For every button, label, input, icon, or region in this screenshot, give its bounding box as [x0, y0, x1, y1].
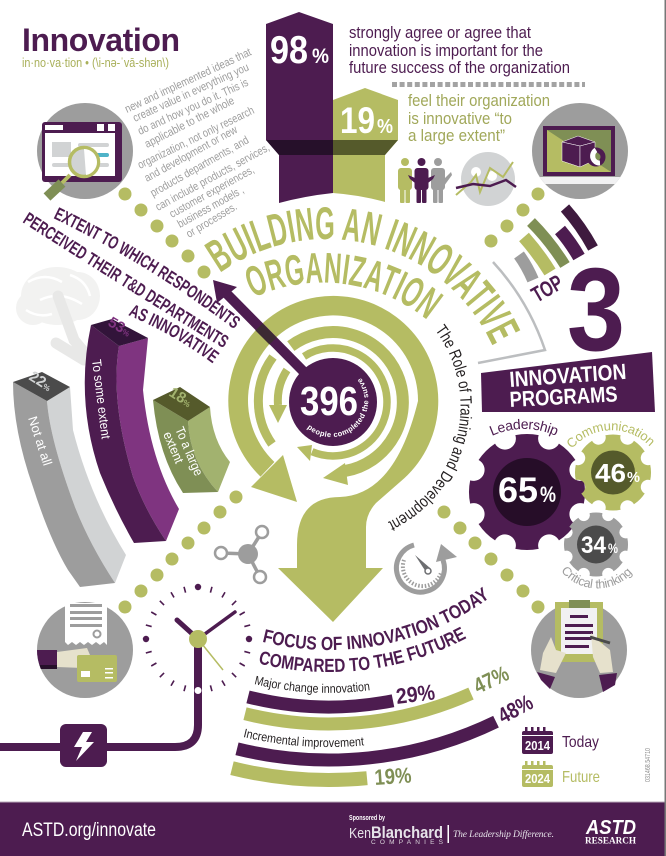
pillar: 19 percent: %	[377, 116, 393, 138]
definition text	[123, 46, 272, 241]
heading: top 3: TOP	[527, 270, 567, 307]
icon: lightning plug	[60, 724, 107, 767]
center circle: 396 people: people completed the survey	[306, 378, 368, 438]
pillar: 98 percent: %	[312, 45, 329, 68]
top 3 arc bars	[519, 208, 593, 280]
clock ticks	[146, 587, 250, 691]
footer	[0, 802, 664, 856]
banner: innovation programs: PROGRAMS	[509, 381, 618, 412]
icon: browser window and magnifier	[37, 103, 133, 199]
chart: incremental improvement	[230, 689, 537, 790]
icon: faint brain and pointing hand	[16, 267, 100, 360]
legend: today	[522, 727, 599, 754]
bar: 22 percent not at all	[13, 368, 126, 587]
banner: innovation programs	[481, 352, 655, 412]
footer: The Leadership Difference.	[453, 829, 554, 840]
center circle: 396 people	[289, 358, 377, 446]
chart: major change innovation: Major change innovation	[254, 676, 370, 695]
bar: 53 percent to some extent: To some extent	[89, 359, 114, 440]
definition text: create value in everything you	[131, 62, 251, 125]
heading: building an innovative organization: ORGANIZATION	[246, 253, 444, 319]
text: feel their organization: is innovative “to	[408, 110, 512, 128]
pillar: 98 percent: 98	[270, 29, 308, 72]
gear: leadership 65 percent: %	[540, 482, 556, 507]
center circle: 396 people: 396	[300, 378, 358, 424]
lightbulb arrow graphic	[228, 296, 438, 622]
gear: critical thinking 34 percent: %	[608, 540, 618, 556]
bar: 22 percent not at all: 22%	[26, 368, 55, 395]
bar: 18 percent to a large extent	[153, 384, 230, 493]
footer: Ken	[349, 825, 371, 842]
icon: people	[398, 158, 452, 203]
icon: laptop with box	[532, 103, 628, 199]
chart: major change innovation: 29%	[395, 679, 436, 709]
title: Innovation	[22, 22, 180, 58]
definition text: products departments, and	[149, 135, 251, 200]
gear: critical thinking 34 percent: 34	[581, 532, 607, 559]
icon: clipboard and hands	[531, 600, 627, 698]
arrow: toward extent chart	[213, 280, 305, 373]
chart: incremental improvement: 48%	[494, 689, 537, 728]
heading: extent respondents: AS INNOVATIVE	[128, 305, 220, 364]
text: feel their organization: a large extent”	[408, 127, 505, 145]
heading: top 3: 3	[567, 244, 625, 376]
gear: leadership 65 percent: 65	[498, 471, 538, 510]
definition text: organization, not only research	[136, 105, 256, 172]
footer: COMPANIES	[371, 839, 444, 846]
pillar: 19 percent: 19	[340, 100, 375, 141]
definition text: customer experiences,	[168, 164, 257, 221]
icon: line chart	[456, 152, 516, 206]
definition text: and development or new	[143, 124, 240, 185]
legend: future	[522, 761, 600, 787]
text: strongly agree: strongly agree or agree that	[349, 24, 531, 42]
decorative dots bottom left	[118, 490, 242, 614]
pillar: 98 percent	[266, 12, 333, 203]
legend: today: Today	[562, 734, 599, 751]
gear: critical thinking 34 percent	[562, 512, 633, 588]
footer: ASTD	[585, 817, 636, 839]
decorative dots bottom right	[438, 506, 544, 614]
text: feel their organization	[408, 92, 550, 145]
gear: communication 46 percent: Communication	[567, 421, 654, 447]
heading: building an innovative organization: BUILDING AN INNOVATIVE	[204, 207, 520, 346]
text: strongly agree: innovation is important for the	[349, 42, 543, 60]
job code: 031468.54710	[645, 748, 652, 782]
gear: communication 46 percent: %	[627, 469, 640, 486]
gear: communication 46 percent	[567, 421, 654, 510]
legend: future: Future	[562, 769, 600, 786]
bar: 18 percent to a large extent: To a large	[172, 424, 206, 478]
definition text: do and how you do it. This is	[136, 77, 251, 138]
definition text: applicable to the whole	[143, 95, 237, 151]
banner: innovation programs: INNOVATION	[509, 359, 627, 392]
heading: extent respondents: EXTENT TO WHICH RESPONDENTS	[54, 207, 240, 328]
bar: 18 percent to a large extent: 18%	[166, 384, 195, 411]
definition text: new and implemented ideas that	[123, 46, 254, 116]
chart: major change innovation	[244, 661, 513, 730]
bar: 53 percent to some extent	[85, 314, 179, 543]
text: strongly agree: future success of the organization	[349, 59, 570, 77]
footer: Blanchard	[371, 823, 443, 842]
decorative dots top left	[118, 188, 210, 278]
heading: extent respondents: PERCEIVED THEIR T&D DEPARTMENTS	[22, 212, 228, 347]
definition text: can include products, services,	[154, 142, 272, 214]
gear: critical thinking 34 percent: Critical thinking	[562, 567, 633, 588]
bar: 22 percent not at all: Not at all	[25, 414, 55, 468]
bar: 18 percent to a large extent: extent	[160, 429, 187, 466]
legend: today: 2014	[525, 738, 551, 753]
definition text: business models ,	[176, 184, 246, 231]
heading: focus of innovation: COMPARED TO THE FUTURE	[260, 626, 466, 672]
text: strongly agree	[349, 24, 570, 77]
heading: focus of innovation: FOCUS OF INNOVATION TODAY	[263, 586, 487, 650]
legend: future: 2024	[525, 771, 551, 786]
chart: major change innovation: 47%	[470, 661, 513, 699]
gear: communication 46 percent: 46	[595, 458, 626, 488]
footer: RESEARCH	[585, 836, 636, 846]
definition text: or processes.	[184, 201, 239, 241]
pillar: 19 percent	[333, 88, 398, 202]
decorative dots top right	[484, 188, 544, 248]
icon: receipt and card in hand	[37, 602, 133, 698]
gear: leadership 65 percent: Leadership	[489, 418, 558, 436]
footer: Sponsored by	[349, 815, 385, 822]
text: feel their organization: feel their organization	[408, 92, 550, 110]
icon: stopwatch with arrow	[396, 544, 457, 592]
icon: molecule	[215, 526, 268, 583]
subheading: the role of training and development: The Role of Training and Development	[388, 324, 472, 531]
bar: 53 percent to some extent: 53%	[105, 314, 134, 340]
title: in·no·va·tion • (\i-nə-ˈvā-shən\)	[22, 56, 169, 70]
footer: ASTD.org/innovate	[22, 820, 156, 841]
heading: top 3	[527, 244, 625, 376]
chart: incremental improvement: Incremental improvement	[244, 728, 364, 750]
gear: leadership 65 percent	[468, 418, 585, 550]
clock with power cord	[0, 584, 252, 747]
chart: incremental improvement: 19%	[374, 762, 412, 790]
